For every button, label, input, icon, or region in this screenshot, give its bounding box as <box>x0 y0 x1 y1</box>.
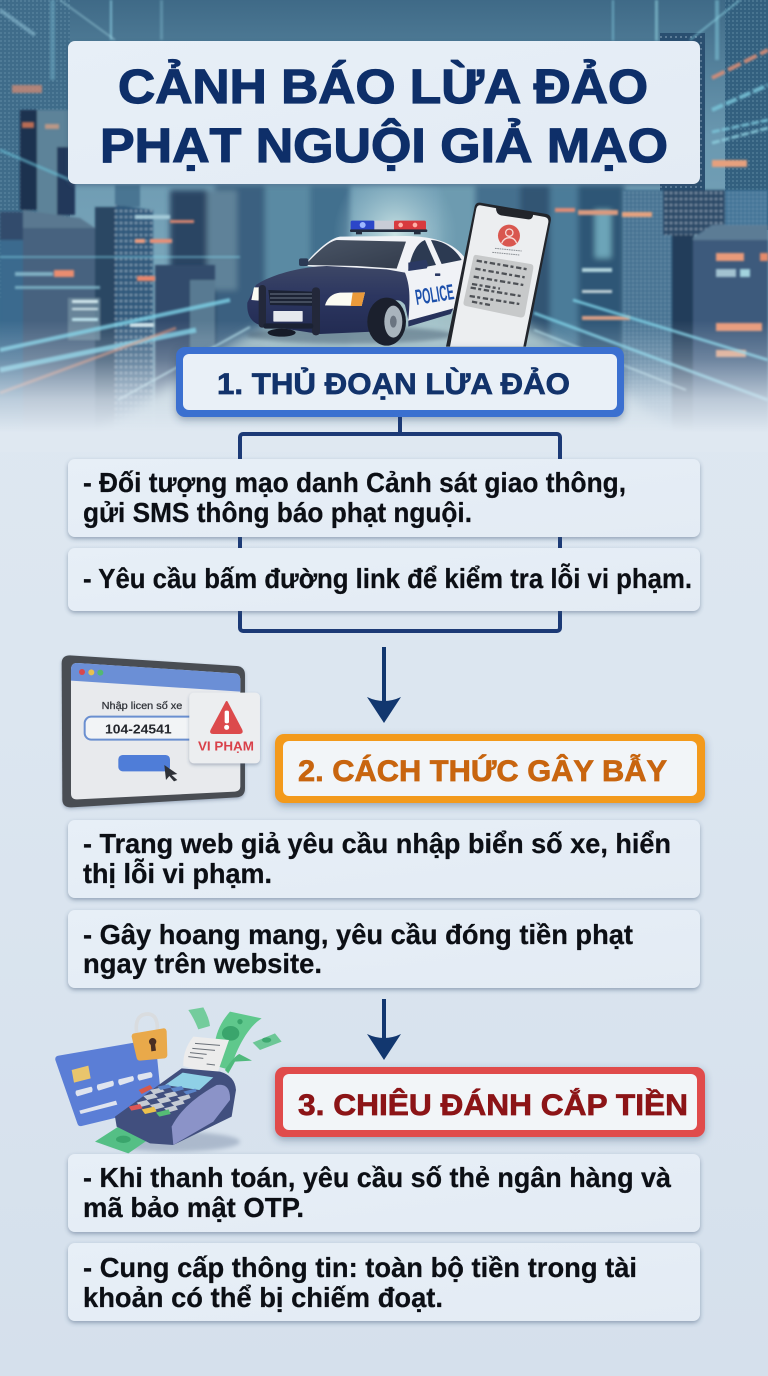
text line: - Đối tượng mạo danh Cảnh sát giao thông, <box>83 467 626 498</box>
section 1 heading: 1. THỦ ĐOẠN LỪA ĐẢO <box>217 367 570 401</box>
text line: - Trang web giả yêu cầu nhập biển số xe, hiển <box>83 828 671 859</box>
panel: theft step 2 <box>68 1243 700 1321</box>
illustration: police car: POLICE <box>414 279 456 310</box>
arrow down 1 <box>367 647 401 723</box>
title panel <box>68 41 700 184</box>
illustration: police car <box>247 221 464 346</box>
panel: trap step 1 <box>68 820 700 898</box>
panel: theft step 1 <box>68 1154 700 1232</box>
background: blurred digital city <box>0 0 768 460</box>
illustration: fake website browser <box>62 655 260 807</box>
section 3 header <box>275 1067 705 1137</box>
section 3 heading: 3. CHIÊU ĐÁNH CẮP TIỀN <box>298 1088 688 1122</box>
text line: - Gây hoang mang, yêu cầu đóng tiền phạt <box>83 919 633 950</box>
text line: mã bảo mật OTP. <box>83 1192 304 1223</box>
text line: gửi SMS thông báo phạt nguội. <box>83 497 472 528</box>
section 1 header <box>176 347 624 417</box>
illustration: card, lock, payment terminal and money <box>55 1007 282 1153</box>
violation warning card <box>189 693 260 763</box>
plate number input: 104-24541 <box>105 722 172 736</box>
title line 2: PHẠT NGUỘI GIẢ MẠO <box>100 118 668 173</box>
section 2 heading: 2. CÁCH THỨC GÂY BẪY <box>298 754 667 788</box>
section 2 header <box>275 734 705 803</box>
road glow <box>132 300 643 422</box>
title line 1: CẢNH BÁO LỪA ĐẢO <box>118 59 648 114</box>
panel: scam step 1 <box>68 459 700 537</box>
text line: thị lỗi vi phạm. <box>83 858 272 889</box>
light streaks <box>0 256 768 400</box>
text line: - Khi thanh toán, yêu cầu số thẻ ngân hàng và <box>83 1162 671 1193</box>
connector bracket <box>240 417 560 631</box>
violation warning card: VI PHẠM <box>198 740 254 754</box>
text line: khoản có thể bị chiếm đoạt. <box>83 1282 443 1313</box>
arrow down 2 <box>367 999 401 1060</box>
panel: scam step 2 <box>68 548 700 611</box>
decorative code rows <box>0 0 768 357</box>
panel: trap step 2 <box>68 910 700 988</box>
text line: - Cung cấp thông tin: toàn bộ tiền trong tài <box>83 1252 637 1283</box>
illustration: phone with SMS <box>446 203 551 347</box>
form label: Nhập licen số xe <box>102 701 182 712</box>
money <box>188 1007 282 1073</box>
text line: ngay trên website. <box>83 948 322 979</box>
text line: - Yêu cầu bấm đường link để kiểm tra lỗi vi phạm. <box>83 563 692 594</box>
